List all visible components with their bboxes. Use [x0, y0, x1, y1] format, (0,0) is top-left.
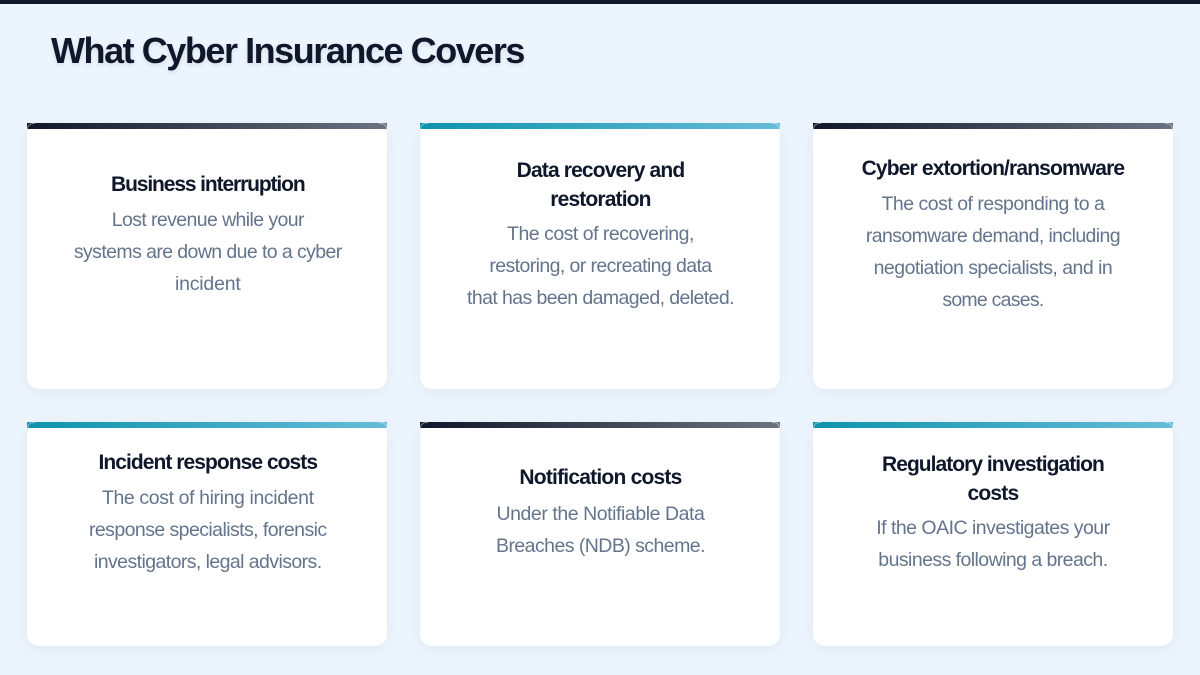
text: business interruption: incident	[175, 273, 241, 295]
panel: regulatory investigation	[812, 422, 1173, 646]
heading: business interruption: Business interruption	[111, 173, 305, 196]
text: notification costs: Breaches (NDB) scheme.	[496, 535, 705, 557]
text: regulatory investigation	[876, 517, 1110, 571]
text: cyber extortion: The cost of responding to a	[882, 193, 1104, 215]
text: notification costs	[496, 503, 705, 557]
text: regulatory investigation: If the OAIC investigates your	[876, 517, 1110, 539]
top accent bar	[0, 0, 1200, 4]
heading: incident response: Incident response costs	[98, 451, 317, 474]
text: cyber extortion	[866, 193, 1120, 311]
text: business interruption: systems are down due to a cyber	[74, 241, 342, 263]
text: data recovery: restoring, or recreating data	[489, 255, 712, 277]
text: incident response	[89, 487, 327, 573]
panel: notification costs	[420, 422, 780, 646]
text: incident response: investigators, legal advisors.	[94, 551, 322, 573]
text: cyber extortion: negotiation specialists, and in	[874, 257, 1112, 279]
panel: incident response	[27, 422, 387, 646]
accent bar: incident response	[27, 422, 387, 428]
text: cyber extortion: ransomware demand, including	[866, 225, 1120, 247]
heading: data recovery: Data recovery and	[517, 159, 684, 182]
accent bar: notification costs	[420, 422, 780, 428]
accent bar: cyber extortion	[812, 123, 1173, 129]
text: incident response: The cost of hiring incident	[102, 487, 314, 509]
panel: data recovery	[420, 123, 780, 389]
text: business interruption: Lost revenue while your	[112, 209, 304, 231]
heading: data recovery: restoration	[550, 188, 651, 211]
text: data recovery	[467, 223, 734, 309]
panel: business interruption	[27, 123, 387, 389]
text: business interruption	[74, 209, 342, 295]
title: What Cyber Insurance Covers	[51, 30, 524, 71]
heading: notification costs: Notification costs	[519, 466, 682, 489]
accent bar: data recovery	[420, 123, 780, 129]
text: cyber extortion: some cases.	[942, 289, 1044, 311]
text: data recovery: that has been damaged, deleted.	[467, 287, 734, 309]
text: data recovery: The cost of recovering,	[507, 223, 694, 245]
text: regulatory investigation: business following a breach.	[878, 549, 1108, 571]
heading: data recovery	[517, 159, 684, 211]
accent bar: business interruption	[27, 123, 387, 129]
panel: cyber extortion	[812, 123, 1173, 389]
heading: cyber extortion: Cyber extortion/ransomware	[862, 157, 1124, 180]
heading: regulatory investigation: Regulatory investigation	[882, 453, 1104, 476]
heading: regulatory investigation	[882, 453, 1104, 505]
text: notification costs: Under the Notifiable Data	[496, 503, 704, 525]
text: incident response: response specialists, forensic	[89, 519, 327, 541]
heading: regulatory investigation: costs	[968, 482, 1018, 505]
accent bar: regulatory investigation	[812, 422, 1173, 428]
